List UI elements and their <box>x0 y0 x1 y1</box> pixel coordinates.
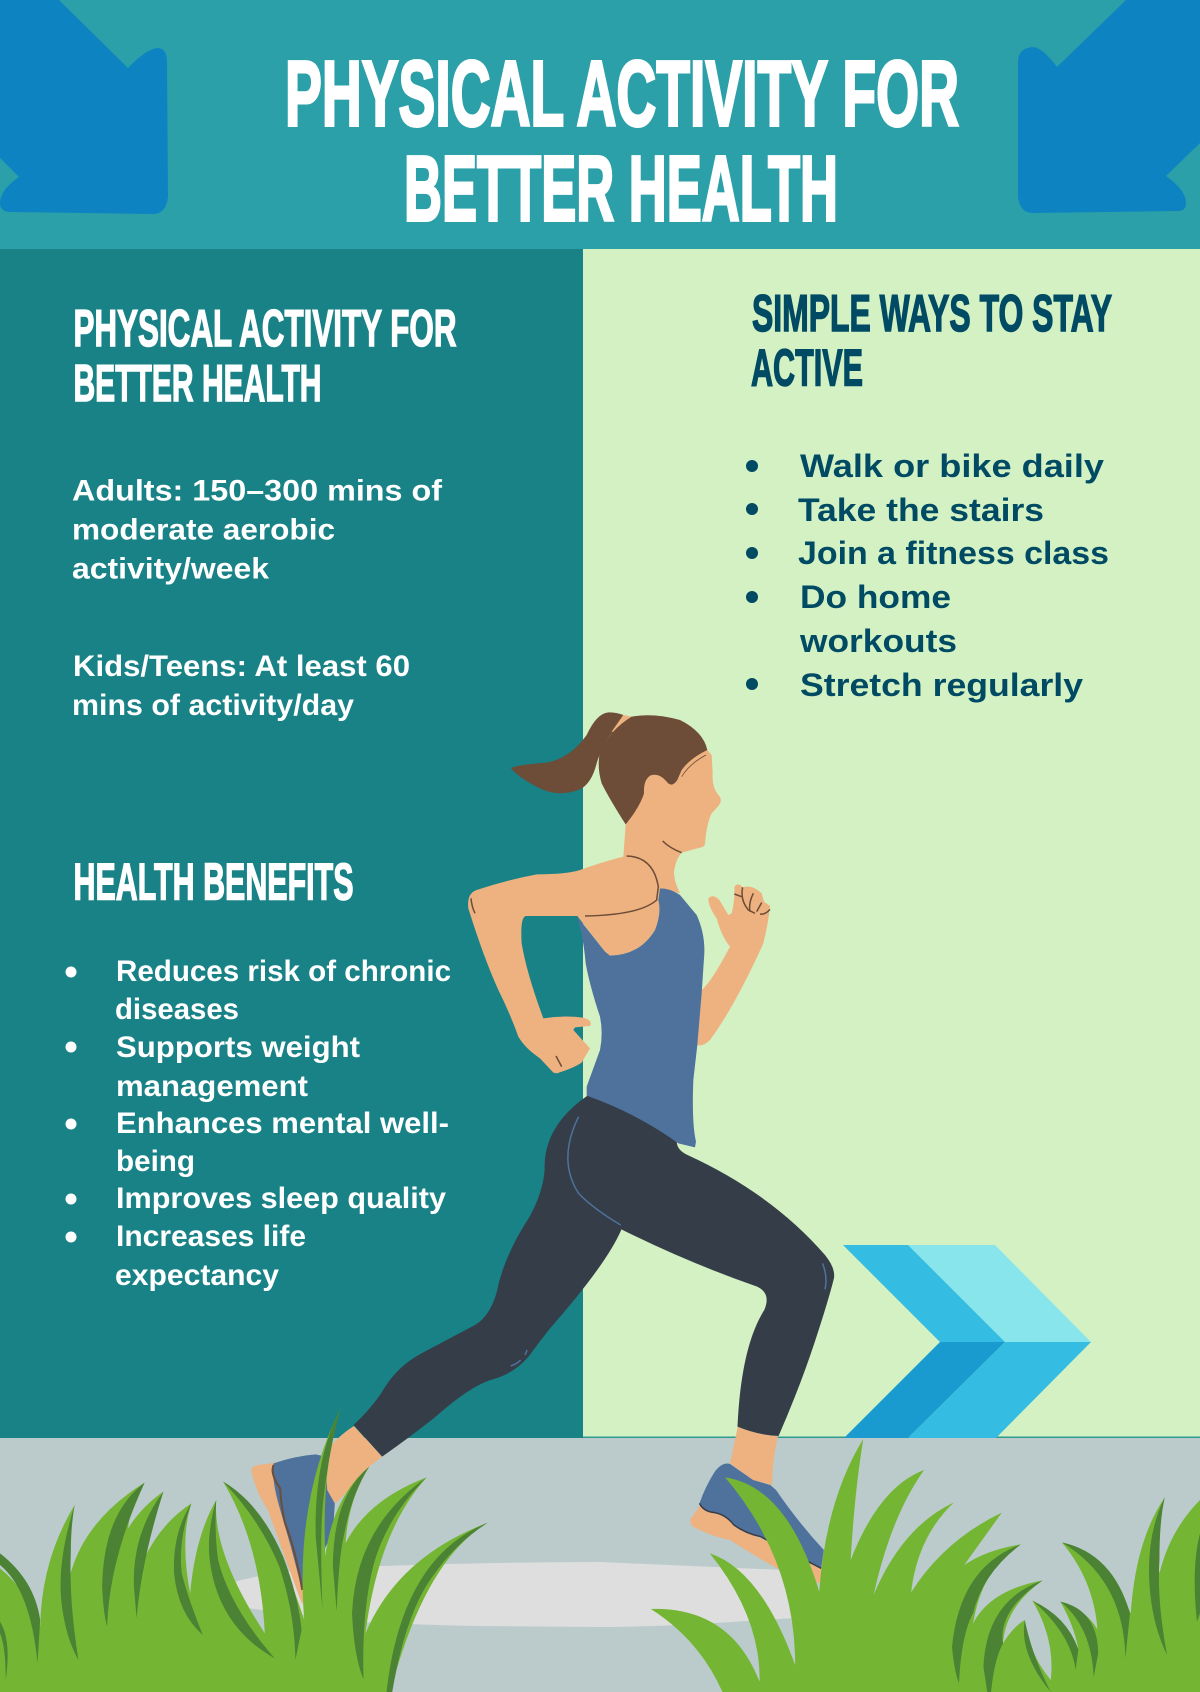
heading: physical activity <box>74 300 456 413</box>
text block: kids guideline: Kids/Teens: At least 60 <box>73 650 410 683</box>
panel: left teal column <box>0 249 583 1438</box>
upper body <box>468 712 721 1147</box>
list: simple ways: Walk or bike daily <box>800 448 1104 484</box>
hair <box>599 715 707 824</box>
heading: simple ways: ACTIVE <box>751 340 863 398</box>
list: health benefits: diseases <box>115 993 239 1026</box>
list: health benefits: being <box>116 1145 195 1178</box>
front foot <box>690 1427 824 1583</box>
illustration: runner <box>251 712 834 1605</box>
list: simple ways: Join a fitness class <box>798 535 1109 571</box>
list: simple ways: workouts <box>799 623 957 659</box>
list: health benefits: Improves sleep quality <box>116 1182 446 1215</box>
list: simple ways: Do home <box>800 579 951 615</box>
list: health benefits: expectancy <box>115 1259 279 1292</box>
text block: kids guideline: mins of activity/day <box>72 689 354 722</box>
panel: right green column <box>583 249 1200 1437</box>
list: health benefits: Enhances mental well- <box>116 1107 449 1140</box>
list: health benefits: Increases life <box>116 1220 306 1253</box>
list: simple ways <box>746 448 1109 703</box>
text block: adult guideline <box>72 474 443 586</box>
icon: top left arrow <box>0 0 168 214</box>
heading: physical activity: BETTER HEALTH <box>74 355 322 413</box>
title <box>285 42 959 240</box>
road stripe <box>218 1562 810 1627</box>
panel: ground <box>0 1438 1200 1692</box>
text block: kids guideline <box>72 650 410 722</box>
list: simple ways: Stretch regularly <box>800 667 1083 703</box>
icon: top right arrow <box>1018 0 1200 213</box>
panel: header band <box>0 0 1200 249</box>
list: health benefits: management <box>116 1070 308 1103</box>
hair tie <box>612 715 632 733</box>
text block: adult guideline: moderate aerobic <box>72 514 335 546</box>
list: health benefits <box>66 955 451 1292</box>
tank top <box>577 888 704 1147</box>
back foot <box>251 1426 382 1605</box>
text block: adult guideline: Adults: 150–300 mins of <box>72 474 443 508</box>
icon: double chevron <box>843 1245 1091 1438</box>
heading: simple ways <box>751 285 1112 398</box>
list: simple ways: Take the stairs <box>798 492 1044 528</box>
text block: adult guideline: activity/week <box>72 552 269 586</box>
title: BETTER HEALTH <box>404 136 838 240</box>
skin: head, neck, near arm <box>468 750 721 1073</box>
illustration: left grass <box>0 1408 488 1692</box>
heading: physical activity: PHYSICAL ACTIVITY FOR <box>74 300 456 358</box>
list: health benefits: Supports weight <box>116 1031 360 1064</box>
list: health benefits: Reduces risk of chronic <box>116 955 451 988</box>
illustration: right grass <box>651 1439 1200 1692</box>
legs <box>354 1096 834 1457</box>
heading: health benefits: HEALTH BENEFITS <box>74 854 354 912</box>
body contour lines <box>471 841 682 1067</box>
ponytail <box>511 712 623 793</box>
far arm <box>697 884 770 1045</box>
